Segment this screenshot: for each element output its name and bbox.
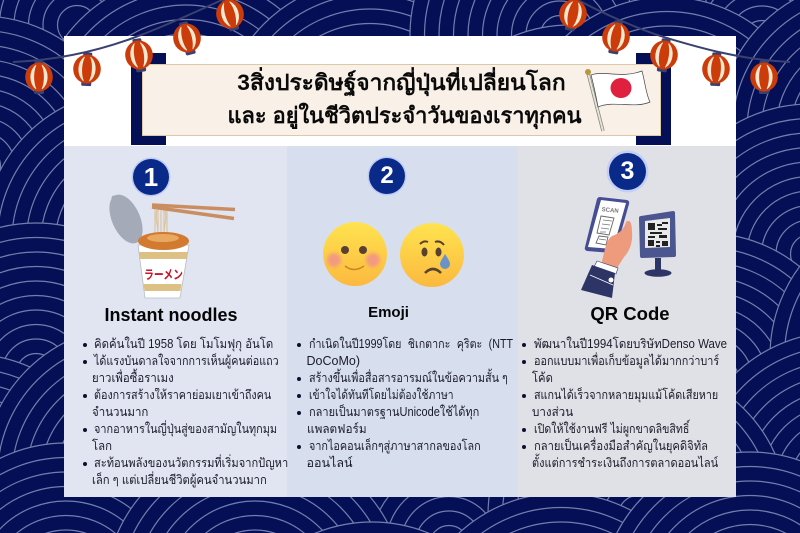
panel: QR code: [518, 146, 736, 497]
list: instant noodle facts: จากอาหารในญี่ปุ่นสู่ของสามัญในทุกมุม: [94, 422, 277, 436]
list: emoji facts: กำเนิดในปี1999โดย ชิเกตากะ คุริตะ (NTT: [309, 337, 513, 351]
icon: hand scanning QR code: [581, 197, 676, 298]
list: instant noodle facts: ได้แรงบันดาลใจจากการเห็นผู้คนต่อแถว: [94, 354, 279, 368]
title line 1: 3สิ่งประดิษฐ์จากญี่ปุ่นที่เปลี่ยนโลก: [237, 70, 566, 95]
list: emoji facts: กลายเป็นมาตรฐานUnicodeใช้ได้ทุก: [309, 405, 479, 419]
list: QR code facts: โค้ด: [532, 371, 552, 385]
number badge 3: 3: [621, 157, 634, 185]
list: instant noodle facts: [83, 336, 288, 488]
list: emoji facts: ออนไลน์: [306, 456, 353, 470]
panel: instant noodles: [64, 146, 287, 497]
heading: Instant noodles: Instant noodles: [104, 305, 238, 325]
icon: hand scanning QR code: SCAN: [601, 207, 619, 215]
number badge 1: 1: [144, 162, 158, 192]
title banner: [143, 65, 660, 135]
heading: Emoji: Emoji: [368, 304, 409, 321]
list: QR code facts: ตั้งแต่การชำระเงินถึงการตลาดออนไลน์: [532, 456, 718, 470]
title line 2: และ อยู่ในชีวิตประจำวันของเราทุกคน: [228, 103, 581, 128]
number badge 2: [369, 158, 405, 194]
list: QR code facts: ออกแบบมาเพื่อเก็บข้อมูลได้มากกว่าบาร์: [534, 354, 719, 368]
lantern string with lanterns: [13, 0, 790, 94]
list: QR code facts: บางส่วน: [532, 405, 573, 419]
list: QR code facts: [522, 336, 727, 470]
list: QR code facts: พัฒนาในปี1994โดยบริษัทDenso Wave: [534, 337, 727, 351]
list: instant noodle facts: สะท้อนพลังของนวัตกรรมที่เริ่มจากปัญหา: [94, 456, 288, 470]
list: QR code facts: สแกนได้เร็วจากหลายมุมแม้โค้ดเสียหาย: [534, 388, 718, 402]
navy title bracket left: [131, 53, 166, 145]
list: instant noodle facts: ยาวเพื่อซื้อราเมง: [92, 371, 173, 385]
list: emoji facts: จากไอคอนเล็กๆสู่ภาษาสากลของโลก: [309, 439, 481, 453]
list: emoji facts: เข้าใจได้ทันทีโดยไม่ต้องใช้ภาษา: [309, 388, 453, 402]
list: QR code facts: กลายเป็นเครื่องมือสำคัญในยุคดิจิทัล: [534, 439, 708, 453]
list: emoji facts: สร้างขึ้นเพื่อสื่อสารอารมณ์ในข้อความสั้น ๆ: [309, 371, 508, 385]
icon: Japanese flag: [585, 69, 650, 132]
list: instant noodle facts: คิดค้นในปี 1958 โดย โมโมฟุกุ อันโด: [94, 337, 273, 351]
list: instant noodle facts: ต้องการสร้างให้ราคาย่อมเยาเข้าถึงคน: [94, 388, 271, 402]
navy title bracket right: [636, 53, 671, 145]
list: instant noodle facts: เล็ก ๆ แต่เปลี่ยนชีวิตผู้คนจำนวนมาก: [92, 473, 266, 487]
number badge 2: 2: [380, 162, 394, 189]
list: instant noodle facts: จำนวนมาก: [92, 405, 148, 419]
icon: smiling and crying emoji: [323, 222, 464, 287]
number badge 1: [133, 159, 169, 195]
heading: QR Code: QR Code: [590, 303, 670, 324]
list: emoji facts: [297, 336, 513, 470]
list: emoji facts: แพลตฟอร์ม: [306, 422, 366, 436]
panel: emoji: [287, 146, 518, 497]
icon: instant noodle cup: ラーメン: [144, 264, 183, 283]
list: QR code facts: เปิดให้ใช้งานฟรี ไม่ผูกขาดลิขสิทธิ์: [534, 422, 689, 436]
icon: instant noodle cup: [109, 194, 236, 298]
list: emoji facts: DoCoMo): [306, 354, 360, 368]
white main sheet: [64, 36, 736, 146]
list: instant noodle facts: โลก: [92, 439, 111, 453]
number badge 3: [609, 153, 646, 190]
